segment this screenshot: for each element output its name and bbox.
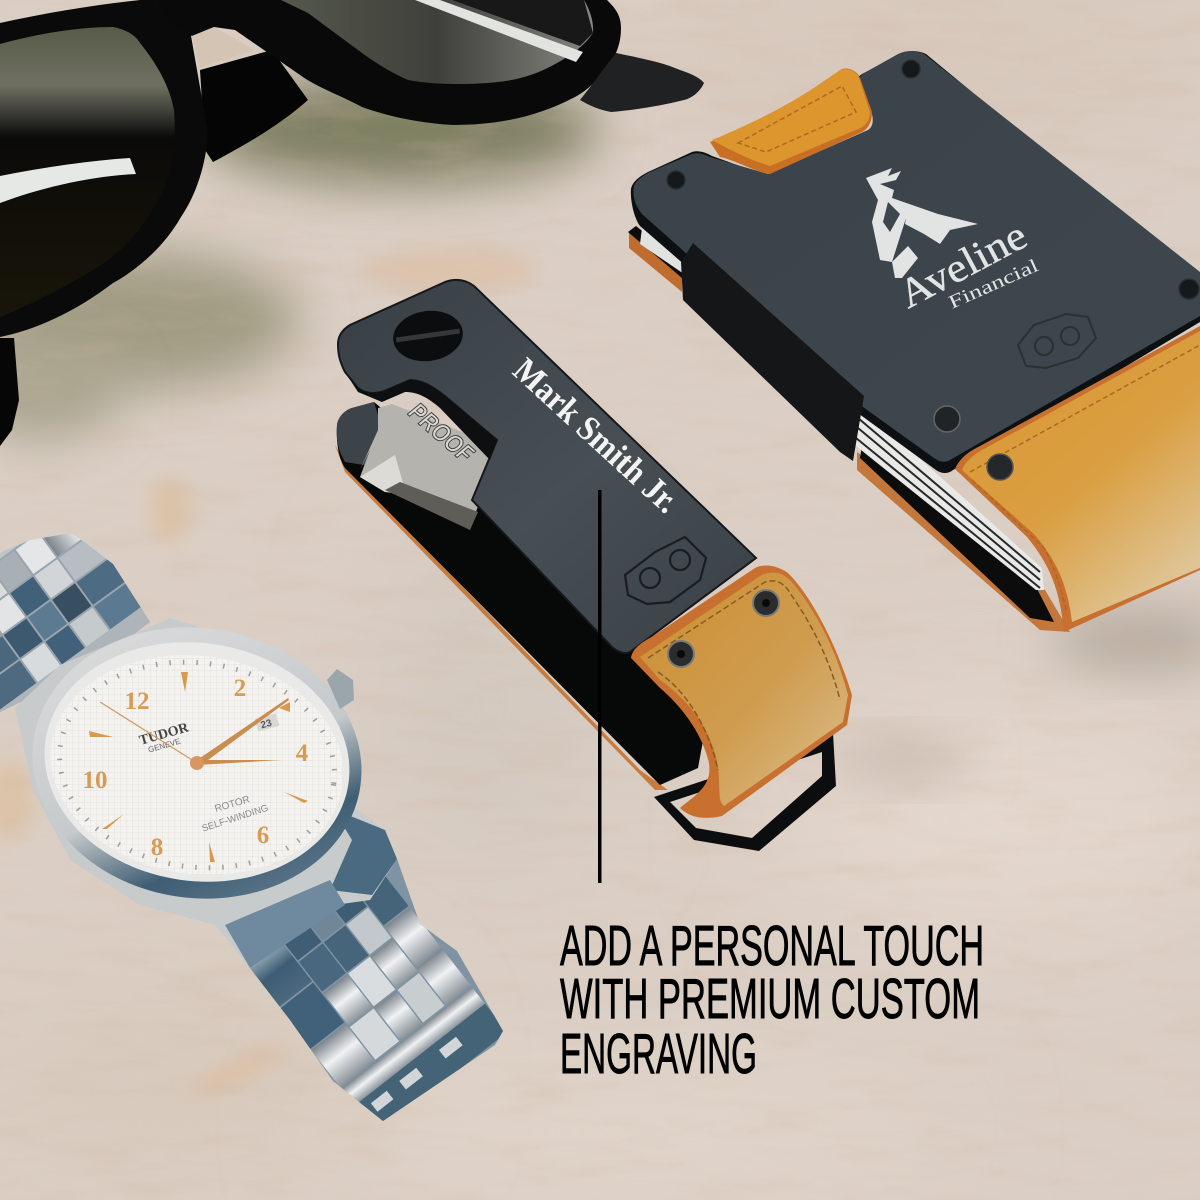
watch dial: TUDOR [138, 720, 191, 749]
wallet metal plate [631, 51, 1200, 473]
wallet lower black base [860, 445, 1054, 622]
sunglasses left lens reflection [0, 158, 136, 203]
wallet leather strap [955, 326, 1200, 632]
watch dial: 6 [257, 822, 269, 849]
organizer key [360, 397, 495, 530]
watch bracelet upper [0, 533, 150, 712]
sunglasses right lens reflection [415, 0, 583, 62]
watch dial: 12 [124, 688, 150, 715]
organizer lower plate [337, 402, 705, 785]
watch [15, 606, 397, 968]
wallet lower orange edge [857, 452, 1070, 632]
watch dial: 10 [82, 767, 108, 794]
wallet logo and engraved name: Financial [945, 255, 1042, 314]
wallet [628, 51, 1200, 632]
sunglasses right lens [281, 0, 593, 84]
organizer metal plate [338, 280, 756, 653]
wallet logo and engraved name: Aveline [891, 212, 1034, 317]
wallet cards [640, 228, 1044, 590]
callout text [560, 914, 984, 1086]
callout leader line [598, 490, 602, 883]
wallet back black layer [628, 226, 682, 278]
watch dial: 8 [151, 834, 163, 861]
sunglasses temple tip [580, 53, 704, 112]
wallet leather pull tab [710, 69, 872, 174]
organizer key: PROOF [403, 397, 479, 469]
watch dial: 2 [234, 675, 246, 702]
watch dial: ROTOR [214, 794, 251, 815]
organizer screw [390, 306, 466, 366]
organizer engraved name: Mark Smith Jr. [506, 350, 687, 521]
organizer metal loop [654, 733, 836, 851]
watch dial: SELF-WINDING [201, 803, 270, 835]
organizer brand mark [625, 537, 706, 604]
sunglasses right rim [155, 0, 621, 125]
sunglasses far temple arm [200, 50, 308, 162]
wallet logo and engraved name [866, 168, 1042, 317]
watch case and lugs [15, 606, 397, 968]
callout text: ENGRAVING [560, 1022, 757, 1086]
watch dial: 23 [260, 718, 274, 731]
watch dial [36, 637, 358, 893]
organizer orange edge [335, 445, 668, 790]
sunglasses right lens dark stripe [452, 0, 593, 46]
wallet screws [667, 60, 1199, 432]
sunglasses [0, 0, 704, 446]
organizer leather strap [631, 566, 852, 818]
wallet brand mark [1018, 314, 1096, 368]
key organizer [335, 280, 852, 851]
watch dial: GENEVE [147, 737, 182, 755]
wallet back orange layer [629, 232, 682, 292]
wallet elastic band [681, 243, 864, 461]
sunglasses left rim [0, 0, 208, 337]
watch dial: 4 [296, 740, 309, 767]
sunglasses left arm stub [0, 338, 19, 446]
sunglasses nose gap [192, 27, 254, 68]
watch bracelet lower [249, 859, 503, 1121]
sunglasses left lens [0, 27, 175, 317]
